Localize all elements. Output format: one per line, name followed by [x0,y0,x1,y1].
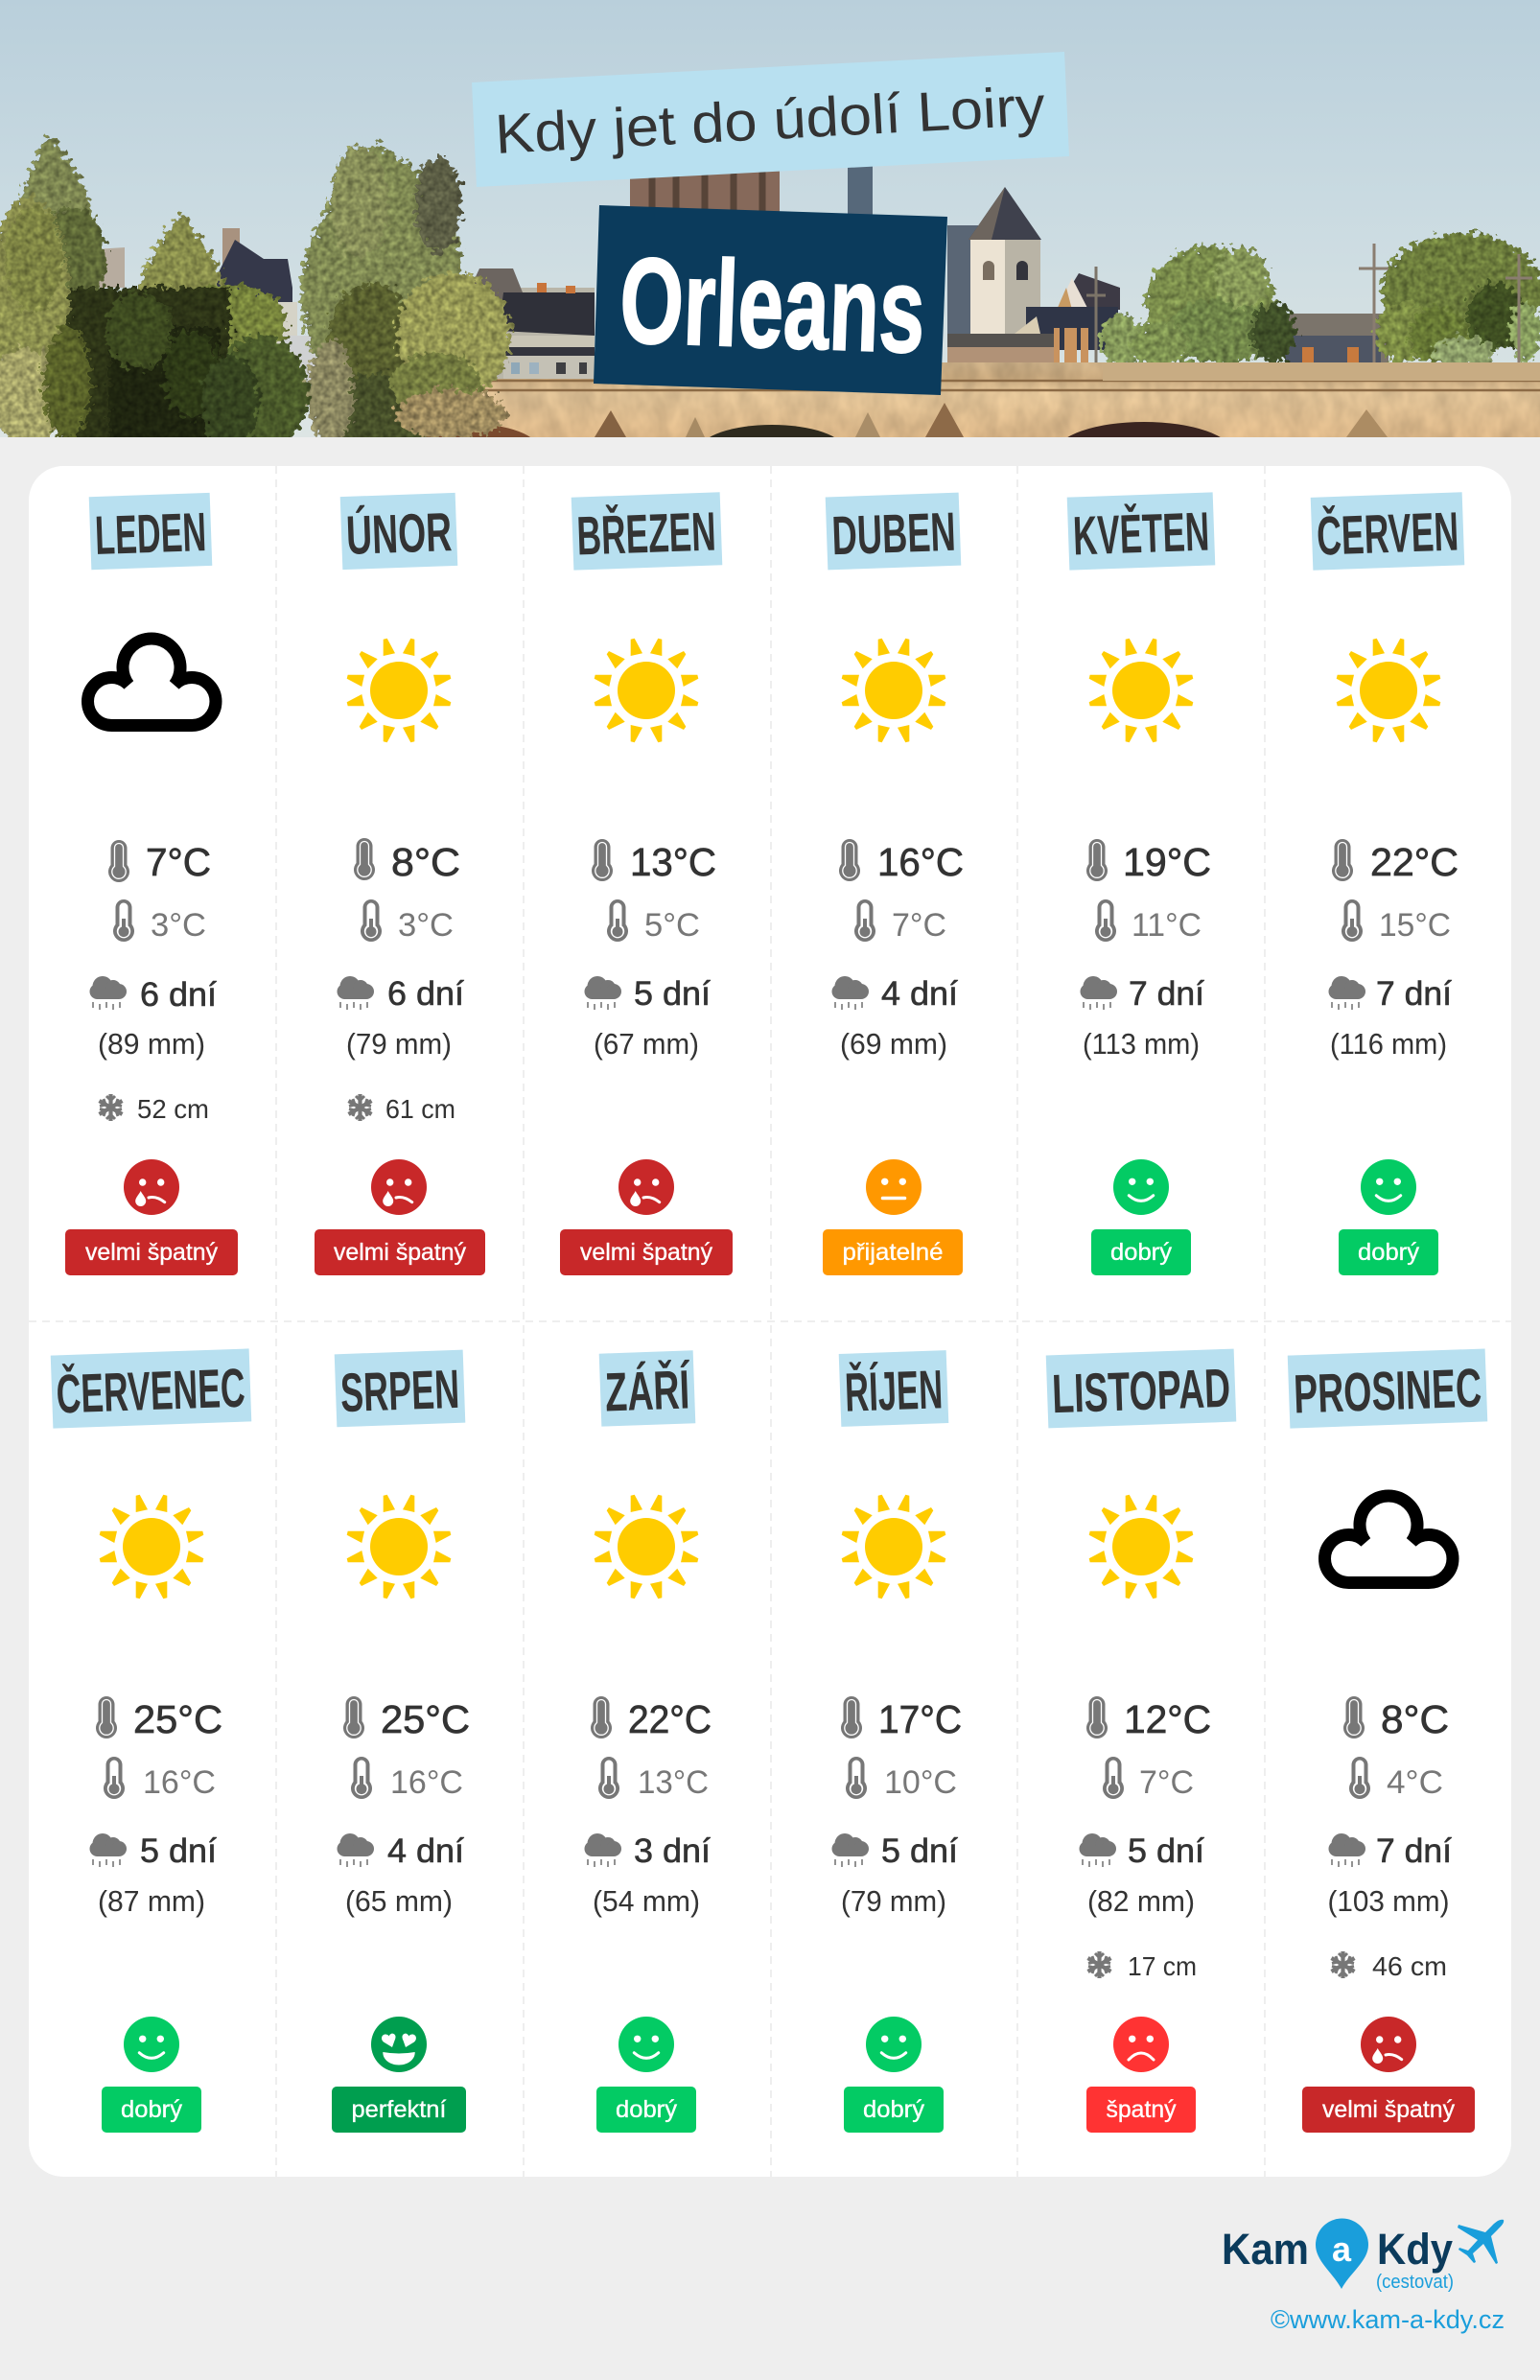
high temperature: 8°C [1381,1697,1449,1741]
month label: SRPEN [339,1359,460,1424]
precipitation: (116 mm) [1330,1027,1447,1061]
rain days: 6 dní [387,975,464,1013]
rating badge: dobrý [1110,1239,1173,1266]
precipitation: (79 mm) [346,1027,452,1061]
rating face [371,1159,427,1215]
rating badge: dobrý [121,2096,183,2123]
high temperature: 19°C [1123,840,1211,884]
snowfall: 52 cm [137,1094,209,1124]
icon: sun [1337,639,1440,742]
low temperature [1342,899,1451,944]
high temperature: 16°C [877,840,964,884]
high temperature [96,1696,222,1741]
rating face [371,2017,427,2072]
snowfall: 61 cm [385,1094,455,1124]
rain days [585,1832,711,1870]
low temperature [598,1757,709,1801]
card: monthly climate table [29,466,1511,2177]
icon: sun [842,1495,945,1598]
low temperature: 10°C [884,1764,957,1801]
month: Září [585,1350,712,2133]
low temperature [351,1757,463,1801]
icon: cloud [88,639,216,725]
rain days: 7 dní [1376,975,1452,1013]
high temperature [592,839,716,884]
rating face [1113,1159,1169,1215]
rating badge: přijatelné [842,1239,944,1266]
low temperature: 7°C [892,907,946,944]
rating badge [332,2087,466,2133]
church tower [947,187,1041,340]
month: Červenec [51,1348,251,2133]
month label: ČERVENEC [56,1357,246,1425]
month label [826,493,961,570]
high temperature: 17°C [878,1697,962,1741]
month label: BŘEZEN [575,500,717,568]
header photo: Orleans bridge and town [0,0,1540,483]
rating badge: dobrý [616,2096,678,2123]
precipitation: (79 mm) [841,1884,946,1918]
rating face [866,1159,922,1215]
precipitation: (54 mm) [593,1884,700,1918]
precipitation: (67 mm) [594,1027,699,1061]
rain days: 3 dní [634,1832,711,1870]
month: Březen [560,492,733,1275]
website url: ©www.kam-a-kdy.cz [1271,2305,1505,2334]
month label: LISTOPAD [1051,1358,1231,1425]
low temperature [846,1757,957,1801]
rating face [618,1159,674,1215]
rating face [618,2017,674,2072]
city name block: Orleans [618,232,927,379]
icon: sun [595,1495,698,1598]
rain days [1080,1832,1204,1870]
cover band restoring the bridge top edge [1103,362,1540,381]
rating badge [560,1229,733,1275]
high temperature: 13°C [630,840,716,884]
month label: KVĚTEN [1072,501,1210,567]
rating badge [823,1229,963,1275]
high temperature [343,1696,470,1741]
logo word: Kam: Kam [1222,2225,1309,2274]
town roofs behind the bridge [947,267,1388,362]
icon: map pin [1316,2219,1368,2289]
rain days: 6 dní [140,976,217,1014]
month: Leden [65,493,238,1275]
month: Prosinec [1288,1348,1487,2133]
rain days: 7 dní [1129,975,1204,1013]
precipitation: (103 mm) [1327,1884,1450,1918]
left trees [0,134,511,451]
precipitation: (82 mm) [1087,1884,1195,1918]
rating badge [1339,1229,1438,1275]
low temperature: 4°C [1387,1764,1443,1801]
low temperature: 5°C [644,907,700,944]
icon: cloud [1325,1496,1453,1582]
low temperature: 13°C [638,1764,709,1801]
stone bridge [427,362,1540,437]
rating badge [1086,2087,1196,2133]
high temperature [354,838,460,884]
rain days: 5 dní [1128,1832,1204,1870]
rain days [338,1832,464,1870]
snowfall [1087,1951,1197,1981]
rain days [1080,975,1204,1013]
high temperature [591,1696,712,1741]
low temperature [361,899,454,944]
rating badge [1091,1229,1191,1275]
icon: sun [1089,639,1193,742]
rating badge [315,1229,485,1275]
precipitation: (69 mm) [840,1027,947,1061]
high temperature: 12°C [1124,1697,1211,1741]
precipitation: (113 mm) [1083,1027,1200,1061]
rating badge: dobrý [863,2096,925,2123]
icon: sun [347,639,451,742]
rating badge [1302,2087,1475,2133]
low temperature [1103,1757,1194,1801]
icon: sun [1089,1495,1193,1598]
rain days [832,1832,958,1870]
low temperature [113,899,206,944]
cathedral towers [630,167,873,215]
lamp posts [1359,244,1532,362]
rating badge [102,2087,201,2133]
low temperature: 16°C [390,1764,463,1801]
right trees [1101,233,1540,369]
high temperature: 22°C [1370,840,1458,884]
rain days [1329,975,1452,1013]
low temperature [607,899,700,944]
rain days: 4 dní [387,1832,464,1870]
month label [1067,492,1215,571]
rain days: 5 dní [634,975,711,1013]
rating face [1361,2017,1416,2072]
snowfall [349,1094,455,1124]
snowfall [100,1094,209,1124]
high temperature: 25°C [133,1697,222,1741]
precipitation: (65 mm) [345,1884,453,1918]
month label: ZÁŘÍ [604,1358,692,1423]
snowfall: 17 cm [1128,1951,1197,1981]
month label [1046,1349,1236,1428]
houses behind left trees [67,228,595,384]
rating face [124,1159,179,1215]
icon: sun [595,639,698,742]
low temperature: 15°C [1379,907,1451,944]
icon: map pin: a [1332,2229,1352,2269]
month label [51,1348,251,1429]
month: Listopad [1046,1349,1236,2133]
rating face [124,2017,179,2072]
rating badge: špatný [1107,2096,1177,2123]
month: Duben [823,493,964,1275]
rating badge: velmi špatný [580,1239,712,1266]
rain days: 5 dní [881,1832,958,1870]
high temperature: 8°C [391,840,460,884]
rain days [338,975,464,1013]
rating face [1113,2017,1169,2072]
rating face [1361,1159,1416,1215]
icon: sun [842,639,945,742]
month label: LEDEN [94,502,207,567]
month: Květen [1067,492,1215,1275]
rain days [90,976,217,1014]
title banner [472,52,1069,187]
month label [340,493,457,570]
high temperature [1086,1696,1211,1741]
month: Říjen [832,1350,962,2133]
rain days: 5 dní [140,1832,217,1870]
high temperature: 22°C [628,1697,712,1741]
rating badge: dobrý [1358,1239,1420,1266]
precipitation: (89 mm) [98,1027,205,1061]
high temperature [841,1696,962,1741]
month label [335,1350,465,1427]
rain days [585,975,711,1013]
rating badge [596,2087,696,2133]
icon: sun [347,1495,451,1598]
month label: ÚNOR [345,502,453,567]
low temperature: 11°C [1132,907,1202,944]
month label [599,1350,695,1427]
month label [89,493,212,570]
logo tagline: (cestovat) [1376,2272,1454,2293]
low temperature: 16°C [143,1764,216,1801]
low temperature [1349,1757,1443,1801]
rating badge: velmi špatný [334,1239,466,1266]
low temperature: 7°C [1139,1764,1194,1801]
high temperature [1086,839,1211,884]
month: Únor [315,493,485,1275]
city name block [594,205,947,395]
snowfall: 46 cm [1372,1951,1447,1981]
icon: sun [100,1495,203,1598]
precipitation: (87 mm) [98,1884,205,1918]
rating badge: perfektní [351,2096,447,2123]
high temperature [108,840,211,884]
month label: ČERVEN [1316,500,1459,568]
rain days [90,1832,217,1870]
logo word: Kdy: Kdy [1377,2225,1453,2274]
rating badge: velmi špatný [1322,2096,1455,2123]
rating badge: velmi špatný [85,1239,218,1266]
rain days [1329,1832,1452,1870]
icon: airplane [1458,2220,1504,2264]
low temperature [854,899,946,944]
month label [1311,492,1464,571]
snowfall [1331,1951,1447,1981]
low temperature [1095,899,1202,944]
rating badge [844,2087,944,2133]
high temperature [1332,839,1458,884]
high temperature [839,839,964,884]
rating badge [65,1229,238,1275]
high temperature [1343,1696,1449,1741]
rain days [832,975,958,1013]
high temperature: 7°C [146,840,211,884]
rating face [866,2017,922,2072]
month label [839,1350,948,1427]
low temperature: 3°C [398,907,454,944]
low temperature [104,1757,216,1801]
rain days: 7 dní [1376,1832,1452,1870]
low temperature: 3°C [151,907,206,944]
title banner: Kdy jet do údolí Loiry [494,75,1046,166]
month label [572,492,722,571]
footer logo: Kam a Kdy [1222,2219,1505,2334]
month: Srpen [332,1350,470,2133]
month label: ŘÍJEN [844,1358,944,1424]
month: Červen [1311,492,1464,1275]
high temperature: 25°C [381,1697,470,1741]
rain days: 4 dní [881,975,958,1013]
month label: DUBEN [831,502,957,567]
